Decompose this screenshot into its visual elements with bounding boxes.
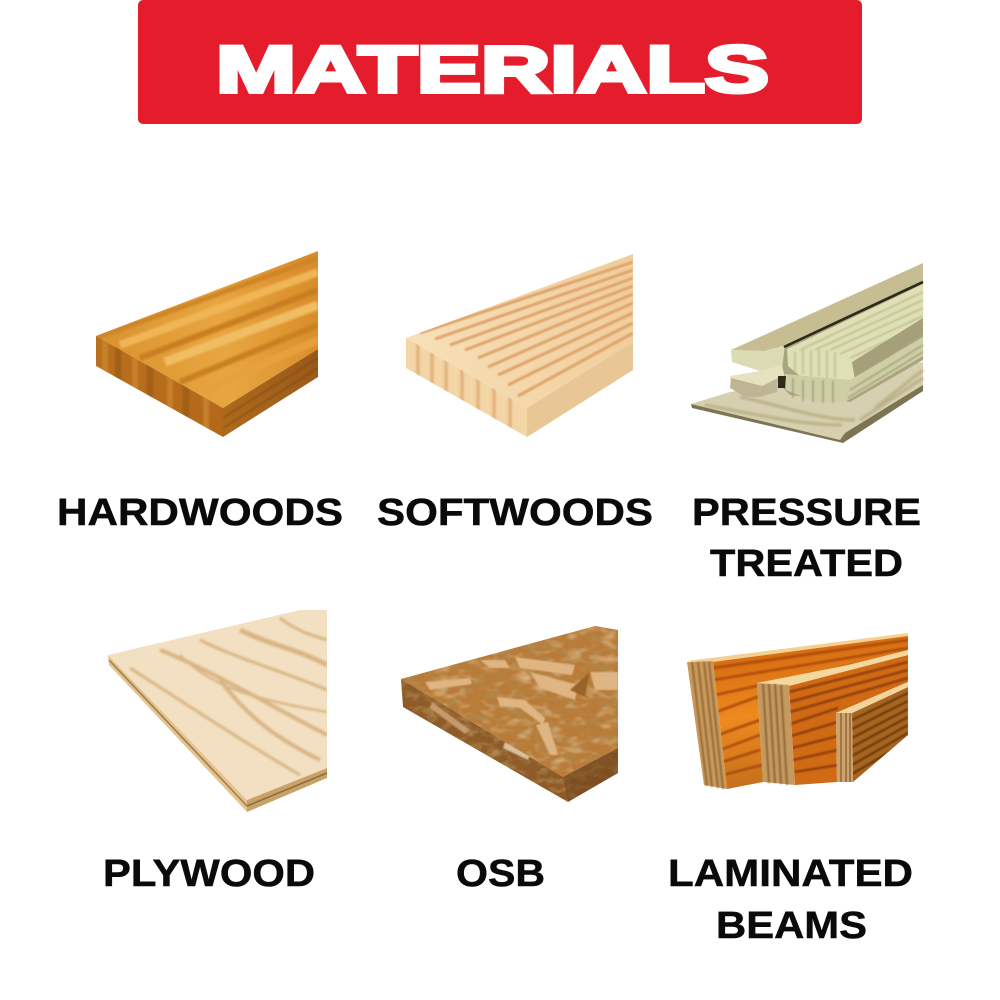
label: laminated beams: LAMINATED: [668, 853, 913, 895]
label: laminated beams: [668, 853, 913, 947]
label: pressure treated: TREATED: [710, 543, 903, 585]
title banner: [138, 0, 862, 124]
material: pressure treated: [691, 263, 923, 443]
upper wide board: [787, 284, 923, 380]
material: softwoods: [406, 254, 633, 437]
label: pressure treated: PRESSURE: [692, 492, 921, 534]
label: hardwoods: HARDWOODS: [57, 492, 343, 534]
label: softwoods: SOFTWOODS: [377, 492, 653, 534]
large beam: [713, 635, 908, 789]
material: plywood: [108, 610, 327, 812]
label: osb: OSB: [456, 853, 545, 895]
base sheet: [691, 362, 923, 440]
material: laminated beams: [687, 633, 908, 789]
shadow fill behind boards: [775, 280, 923, 402]
middle beam: [789, 655, 908, 785]
title: MATERIALS: [216, 32, 769, 106]
material: hardwoods: [96, 251, 318, 437]
lower boards: [730, 365, 785, 392]
label: plywood: PLYWOOD: [103, 853, 315, 895]
small beam: [852, 687, 908, 782]
material: osb: [401, 626, 618, 802]
upper thin board: [731, 263, 923, 351]
label: pressure treated: [692, 492, 921, 585]
label: laminated beams: BEAMS: [716, 905, 867, 947]
